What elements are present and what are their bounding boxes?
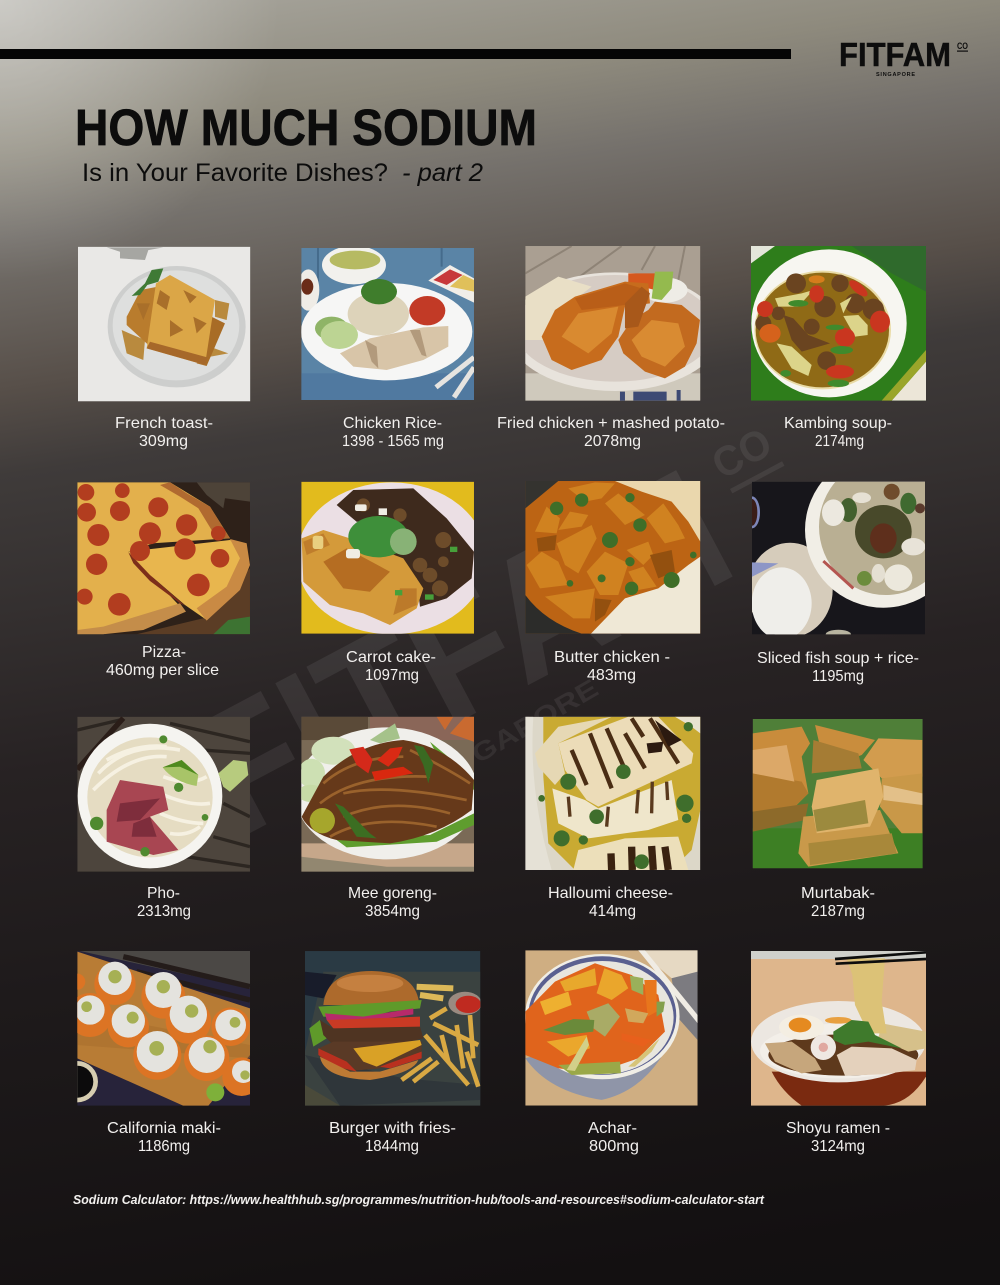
caption: Halloumi cheese: Halloumi cheese- [548,885,673,902]
photo: Kambing soup [751,246,926,401]
caption: Achar: 800mg [589,1138,639,1155]
caption: Burger with fries: 1844mg [365,1138,419,1155]
subtitle: Is in Your Favorite Dishes? [82,159,388,187]
subtitle: - part 2 [402,159,483,187]
caption: Halloumi cheese: 414mg [589,903,636,920]
photo: Chicken rice [297,246,474,400]
caption: Shoyu ramen [786,1120,890,1155]
caption: California maki [107,1120,221,1155]
photo: Pho [77,717,250,872]
watermark logo: FITFAM [163,433,760,874]
title: HOW MUCH SODIUM [75,99,537,156]
caption: Murtabak [801,885,875,920]
caption: Butter chicken: 483mg [587,667,636,684]
photo: Halloumi cheese [525,717,700,870]
caption: Shoyu ramen: Shoyu ramen - [786,1120,890,1137]
caption: Sliced fish soup: 1195mg [812,668,864,685]
watermark logo: GAPORE [466,673,603,769]
caption: Mee goreng: 3854mg [365,903,420,920]
photo: Achar [525,950,698,1106]
caption: Achar [588,1120,639,1155]
caption: Halloumi cheese [548,885,673,920]
photo: Sliced fish soup and rice [744,452,962,639]
caption: Achar: Achar- [588,1120,637,1137]
caption: Pho: 2313mg [137,903,191,920]
caption: Carrot cake: 1097mg [365,667,419,684]
caption: Pho: Pho- [147,885,180,902]
photo: California maki [57,951,261,1106]
footer: sodium calculator source: Sodium Calculator: https://www.healthhub.sg/programmes/nutrition-hub/tools-and-resources#sodium-calculator-start [73,1193,765,1207]
caption: Kambing soup [784,415,892,450]
photo: Butter chicken [525,481,700,634]
caption: Butter chicken [554,649,670,684]
caption: Chicken Rice: Chicken Rice- [343,415,442,432]
caption: Burger with fries [329,1120,456,1155]
caption: Carrot cake: Carrot cake- [346,649,436,666]
caption: French toast: 309mg [139,433,188,450]
caption: Mee goreng [348,885,437,920]
caption: Kambing soup: 2174mg [815,433,864,450]
photo: Fried chicken and mashed potato [508,246,722,401]
caption: California maki: California maki- [107,1120,221,1137]
caption: Fried chicken [497,415,725,450]
logo: FITFAM Co Singapore: SINGAPORE [876,72,915,78]
caption: Sliced fish soup: Sliced fish soup + rice- [757,650,919,667]
caption: Burger with fries: Burger with fries- [329,1120,456,1137]
photo: French toast [78,247,250,401]
photo: Shoyu ramen [751,951,926,1106]
logo: FITFAM Co Singapore: CO [957,41,968,52]
photo: Carrot cake [297,482,487,634]
caption: Murtabak: Murtabak- [801,885,875,902]
caption: Murtabak: 2187mg [811,903,865,920]
caption: Kambing soup: Kambing soup- [784,415,892,432]
caption: Pizza: 460mg per slice [106,662,219,679]
caption: Butter chicken: Butter chicken - [554,649,670,666]
photo: Mee goreng [295,717,478,872]
caption: Fried chicken: 2078mg [584,433,641,450]
top bar [0,49,791,59]
caption: Chicken Rice: 1398 - 1565 mg [342,433,444,450]
caption: French toast [115,415,213,450]
logo: FITFAM Co Singapore: FITFAM [839,36,951,73]
caption: Carrot cake [346,649,436,684]
caption: Chicken Rice [342,415,444,450]
caption: Fried chicken: Fried chicken + mashed potato- [497,415,725,432]
caption: Sliced fish soup [757,650,919,685]
caption: Pho [137,885,191,920]
photo: Burger with fries [305,951,482,1106]
caption: Pizza [106,644,219,679]
caption: French toast: French toast- [115,415,213,432]
caption: Mee goreng: Mee goreng- [348,885,437,902]
photo: Pizza [77,482,250,634]
caption: California maki: 1186mg [138,1138,190,1155]
photo: Murtabak [753,719,923,868]
caption: Pizza: Pizza- [142,644,186,661]
watermark logo: CO [704,418,779,488]
caption: Shoyu ramen: 3124mg [811,1138,865,1155]
